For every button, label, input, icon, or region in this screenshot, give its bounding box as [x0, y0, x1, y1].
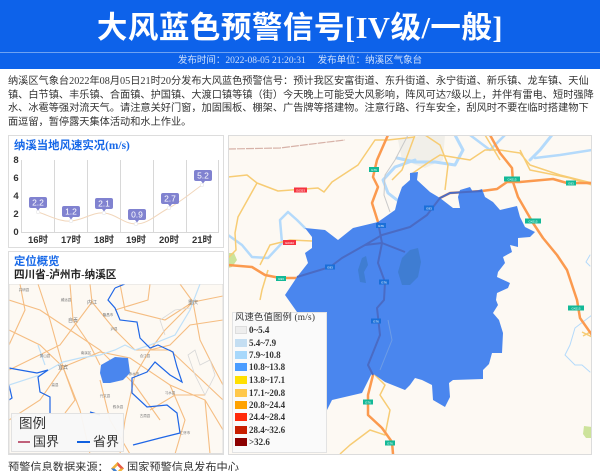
line chart: wind speed by hour: 2.2 [32, 198, 44, 208]
row 17.1~20.8: 17.1~20.8 [249, 388, 285, 398]
legend title: 图例 [19, 416, 46, 431]
line chart: wind speed by hour: 17时 [61, 234, 82, 246]
chart heading: 纳溪当地风速实况(m/s) [14, 140, 130, 152]
city labels: 南溪区 [81, 350, 92, 355]
city labels: 叙永县 [113, 404, 124, 409]
row 5.4~7.9 [235, 338, 276, 348]
city labels: 习水县 [165, 390, 176, 395]
map roads [9, 284, 223, 454]
city labels: 仁怀市 [180, 430, 191, 435]
location path: 四川省-泸州市-纳溪区 [14, 270, 116, 281]
road shields: G4215 [528, 220, 538, 224]
legend title: 风速色值图例 (m/s) [235, 313, 315, 323]
line chart: wind speed by hour: 18时 [94, 234, 115, 246]
city labels: 威远县 [61, 297, 72, 302]
row 24.4~28.4: 24.4~28.4 [249, 412, 285, 422]
panel: location overview [8, 251, 224, 455]
line chart: wind speed by hour: 20时 [159, 234, 180, 246]
rail line [228, 140, 345, 149]
district wind zone [285, 172, 535, 412]
row 7.9~10.8: 7.9~10.8 [249, 350, 281, 360]
lakes inside wind zone [358, 248, 421, 285]
city labels [19, 287, 198, 435]
roads under wind zone [297, 191, 482, 375]
line chart: wind speed by hour: 19时 [126, 234, 147, 246]
row 0~5.4: 0~5.4 [249, 325, 269, 335]
city labels: 屏山县 [40, 353, 51, 358]
line chart: wind speed by hour: 16时 [28, 234, 49, 246]
city labels: 内江 [87, 299, 97, 306]
panel: wind speed chart [8, 135, 224, 248]
city labels: 隆昌市 [103, 312, 114, 317]
row 7.9~10.8 [235, 350, 281, 360]
icon: warning centre logo [111, 462, 124, 471]
row 28.4~32.6: 28.4~32.6 [249, 425, 285, 435]
line chart: wind speed by hour: 8 [13, 155, 19, 166]
city labels: 重庆 [188, 299, 198, 306]
line chart: wind speed by hour: 4 [13, 191, 19, 202]
road shields: G76 [387, 442, 393, 446]
road shields [276, 167, 584, 446]
city labels: 赤水市 [129, 371, 140, 376]
line chart: wind speed by hour: 0.9 [131, 210, 143, 220]
road shields: G76 [365, 400, 371, 404]
city labels: 古蔺县 [140, 413, 151, 418]
location heading: 定位概览 [14, 256, 60, 268]
line chart: wind speed by hour [13, 155, 219, 246]
overview map legend [11, 413, 124, 452]
road shields: G4215 [507, 178, 517, 182]
city labels: 井研县 [19, 287, 30, 292]
row >32.6 [235, 437, 270, 447]
city labels: 自贡 [68, 317, 78, 324]
row 5.4~7.9: 5.4~7.9 [249, 338, 276, 348]
road shields: G93 [568, 182, 574, 186]
row 20.8~24.4: 20.8~24.4 [249, 400, 285, 410]
line chart: wind speed by hour: 2 [13, 209, 19, 220]
green patches [228, 253, 592, 438]
legend: province border: 省界 [93, 434, 119, 449]
road shields: G0340 [285, 241, 294, 245]
road shields: G93 [278, 277, 284, 281]
road shields: G76 [381, 280, 387, 284]
rivers [228, 135, 592, 372]
line chart: wind speed by hour: 21时 [192, 234, 213, 246]
city labels: 兴文县 [100, 393, 111, 398]
expressways [228, 135, 592, 454]
road shields: G4215 [571, 306, 581, 310]
row >32.6: >32.6 [249, 437, 270, 447]
road shields: G76 [378, 224, 384, 228]
line chart: wind speed by hour: 1.2 [65, 206, 77, 216]
province borders [9, 284, 182, 445]
line chart: wind speed by hour: 6 [13, 173, 19, 184]
row 10.8~13.8: 10.8~13.8 [249, 362, 285, 372]
row 0~5.4 [235, 325, 270, 335]
row 13.8~17.1: 13.8~17.1 [249, 375, 285, 385]
line chart: wind speed by hour: 5.2 [197, 170, 209, 180]
publish info bar [0, 52, 600, 69]
warning text block: 纳溪区气象台2022年08月05日21时20分发布大风蓝色预警信号：预计我区安富街道、东升街道、永宁街道、新乐镇、龙车镇、天仙镇、白节镇、丰乐镇、合面镇、护国镇、大渡口镇等镇（街）今天晚上可能受大风影响，阵风可达7级以上，并伴有雷电、短时强降水、冰雹等强对流天气。请注意关好门窗，加固围板、棚架、广告牌等搭建物。注意行路、行车安全，刮风时不要在临时搭建物下面逗留，暂停露天集体活动和水上作业。 [8, 76, 594, 128]
rivers [9, 284, 200, 385]
line chart: wind speed by hour: 0 [13, 227, 19, 238]
road shields: G76 [371, 168, 377, 172]
wind speed colour legend [232, 312, 327, 453]
footer data source [8, 461, 239, 471]
road shields: G93 [426, 206, 432, 210]
district shape [100, 357, 130, 383]
road shields: G0353 [296, 188, 305, 192]
overview map [9, 284, 223, 454]
urban area [398, 135, 445, 168]
publish info bar: 发布时间：2022-08-05 21:20:31 发布单位：纳溪区气象台 [178, 56, 422, 66]
line chart: wind speed by hour: 2.1 [98, 198, 110, 208]
header banner [0, 0, 600, 69]
road shields: G93 [327, 266, 333, 270]
road shields: G76 [373, 320, 379, 324]
city labels: 泸县 [110, 326, 118, 331]
yellow roads [228, 135, 592, 454]
line chart: wind speed by hour: 2.7 [164, 194, 176, 204]
city labels: 高县 [52, 382, 59, 387]
main map [228, 135, 592, 455]
title: 大风蓝色预警信号[IV级/一般] [97, 11, 503, 45]
city labels: 宜宾 [58, 364, 68, 371]
city labels: 合江县 [140, 353, 151, 358]
legend: national border: 国界 [33, 434, 59, 449]
